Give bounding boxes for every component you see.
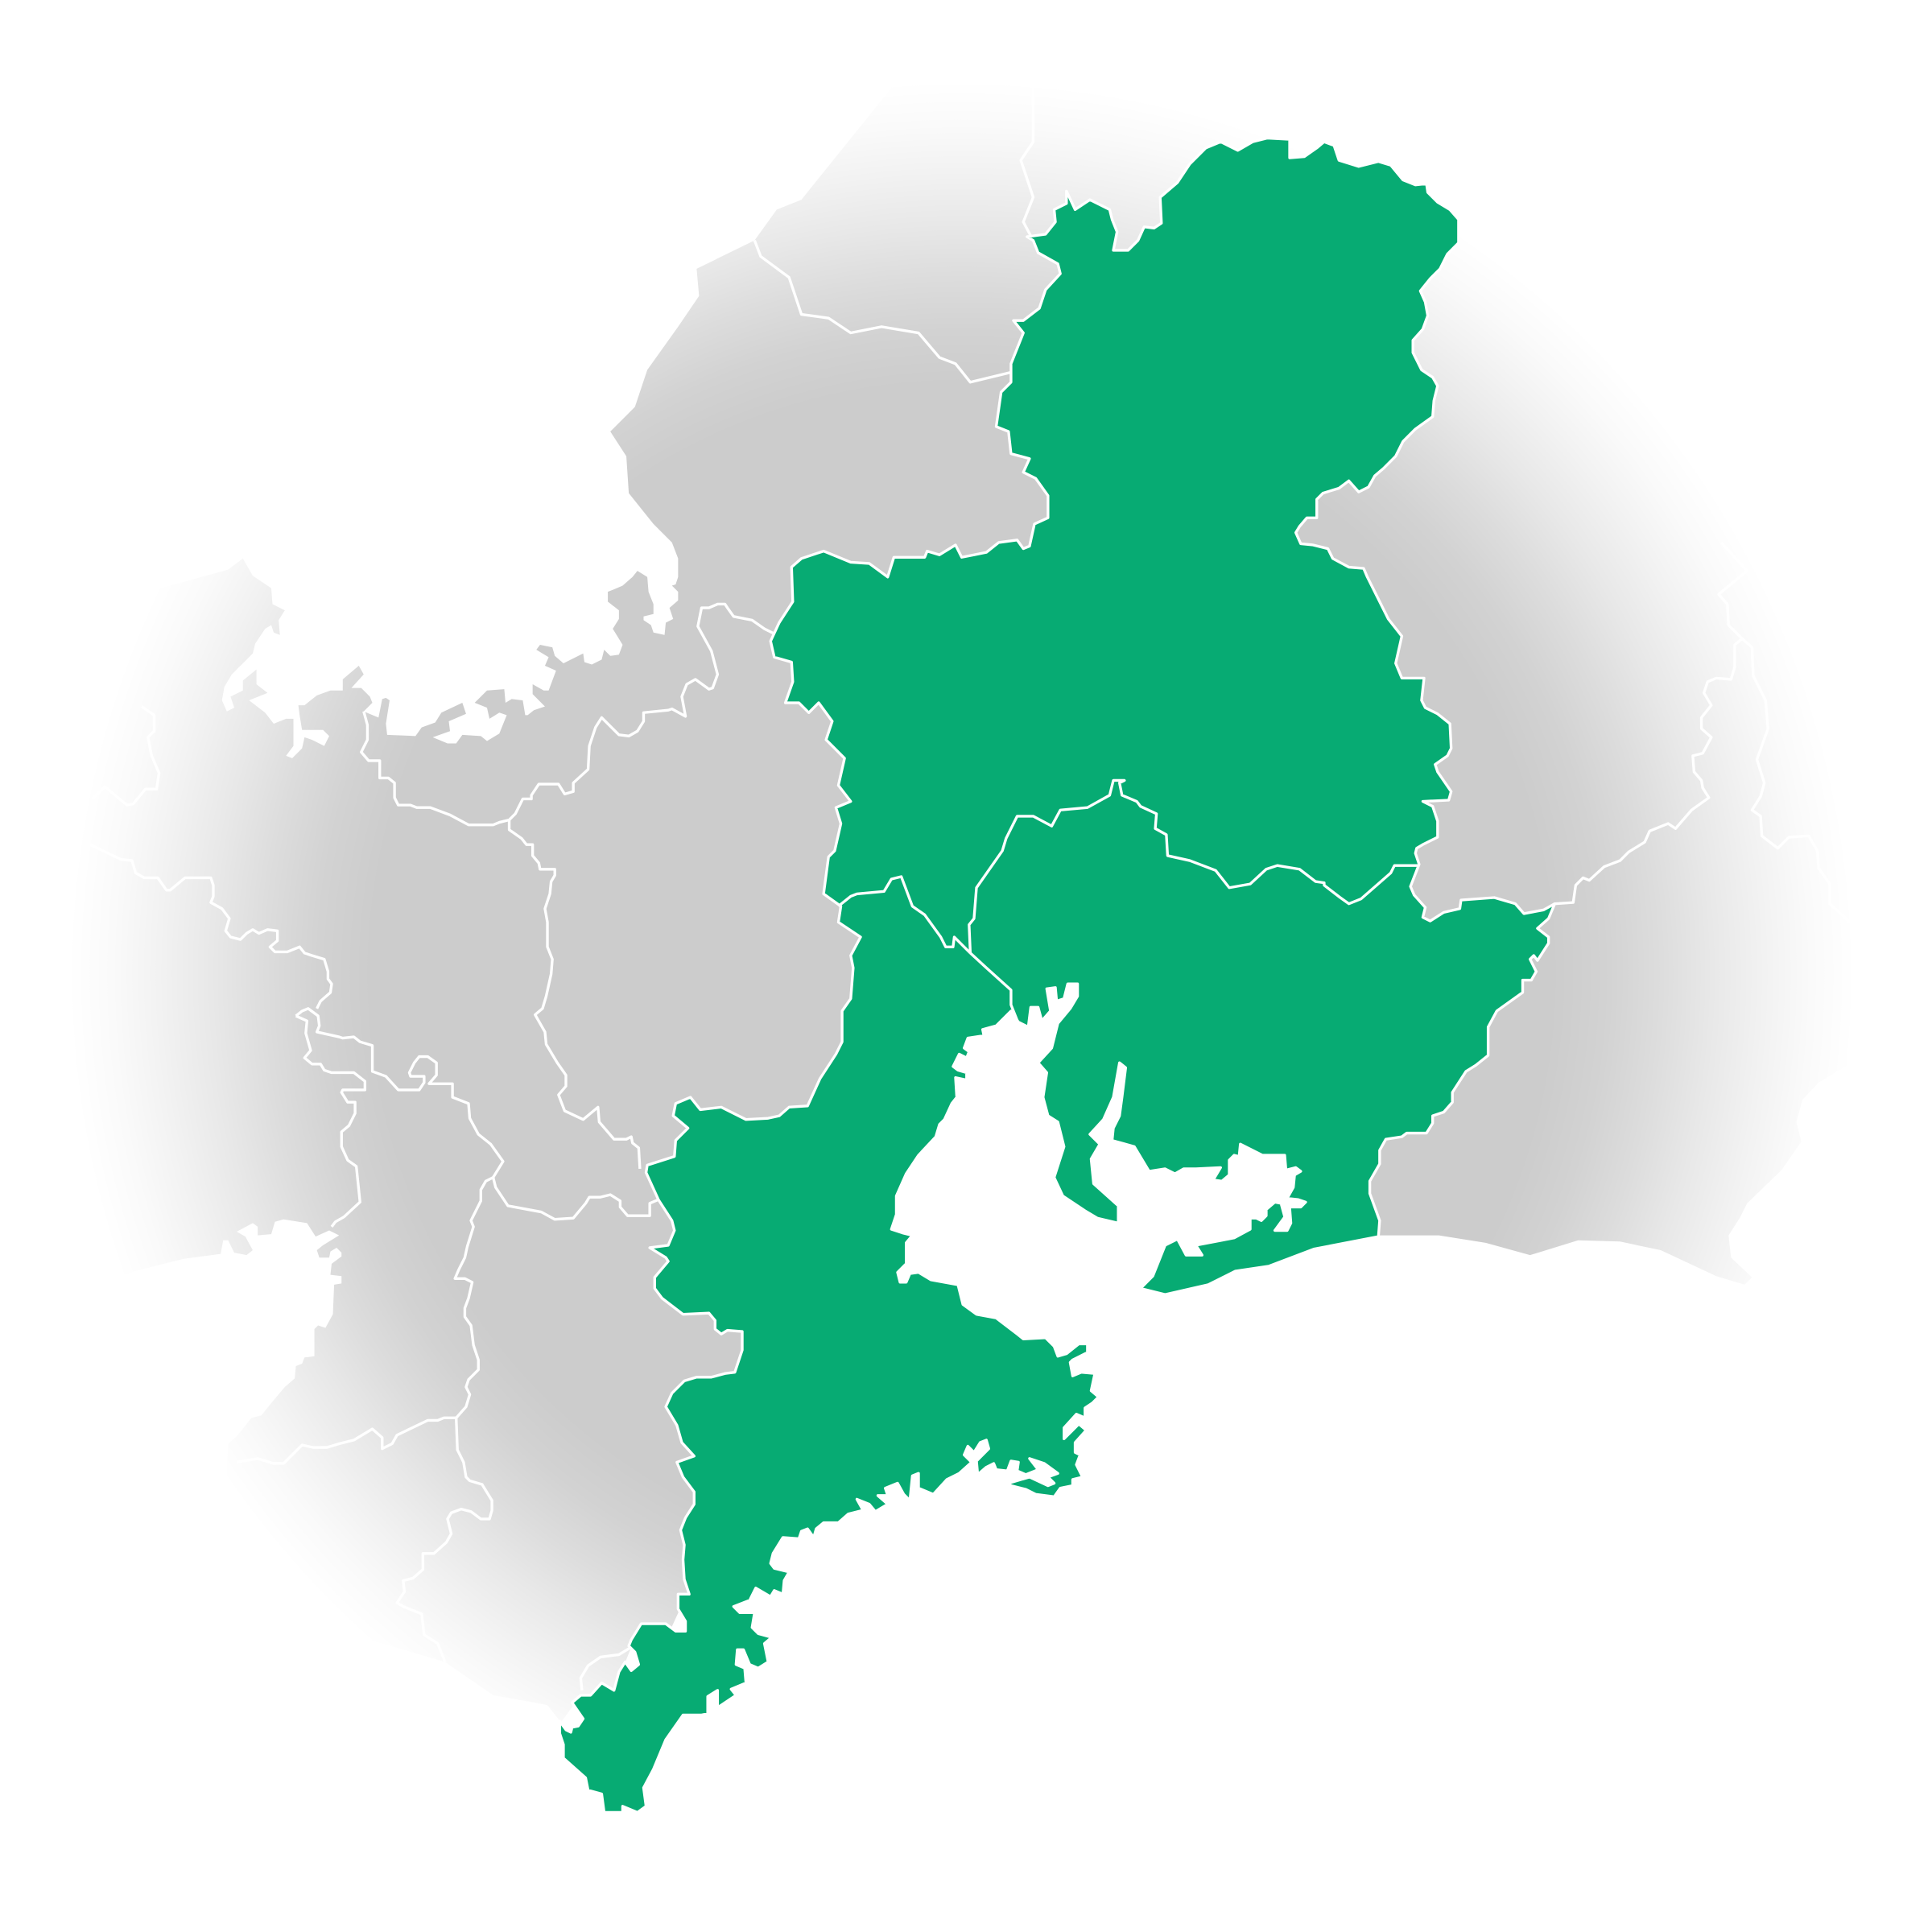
internal boundaries bbox=[838, 780, 1418, 1023]
prefecture boundaries bbox=[138, 147, 1781, 1690]
surrounding prefectures, faded grey bbox=[132, 145, 1791, 1707]
grey landmass bbox=[132, 145, 1791, 1707]
green region fill bbox=[559, 138, 1554, 1812]
map of central Japan bbox=[132, 139, 1791, 1811]
highlighted region: Gifu, Aichi, Mie bbox=[559, 138, 1554, 1812]
